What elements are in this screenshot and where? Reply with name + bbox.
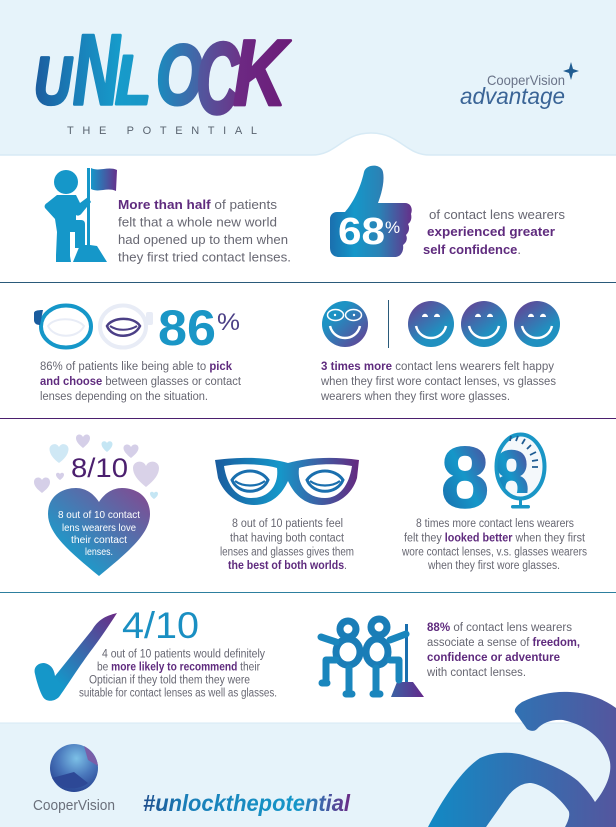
icon: check mark (35, 613, 117, 701)
panel: 68 percent (330, 166, 565, 257)
text block: they first tried contact lenses. (118, 250, 291, 264)
text block: 8 times more contact lens wearers (416, 518, 574, 530)
stat: 86%: % (217, 309, 240, 336)
text block: More than half of patients (118, 197, 278, 212)
text block: when they first wore contact lenses, vs glasses (320, 376, 556, 388)
icon: happy face 2 (461, 301, 507, 347)
title word: UNLOCK: N (73, 14, 121, 125)
text block: with contact lenses. (426, 667, 526, 679)
panel: more than half (45, 168, 291, 264)
CooperVision advantage logo: advantage (460, 83, 565, 109)
hashtag: #unlockthepotential (143, 790, 351, 816)
text block (423, 207, 565, 257)
stat: 86%: 86 (158, 300, 216, 356)
icon: happy face 3 (514, 301, 560, 347)
CooperVision advantage logo: CooperVision (487, 72, 565, 88)
icon: thumbs up: 68 (338, 211, 385, 253)
text block: experienced greater (427, 224, 555, 239)
text block: suitable for contact lenses as well as glasses. (79, 688, 277, 700)
icon: big heart (48, 488, 150, 576)
CooperVision logo (33, 744, 115, 814)
text block (320, 361, 556, 403)
panel: 8 times more (401, 430, 587, 572)
text block (426, 622, 580, 679)
text block: 3 times more contact lens wearers felt happy (321, 361, 554, 373)
icon: person with flag (45, 168, 117, 262)
text block: felt that a whole new world (118, 214, 277, 230)
text block (220, 518, 354, 572)
icon: star (563, 62, 579, 80)
icon: thumbs up: % (385, 218, 400, 237)
icon: 8 and mirror: 8 (441, 430, 489, 526)
text block: Optician if they told them they were (89, 674, 250, 686)
text block (118, 197, 291, 264)
text block: 86% of patients like being able to pick (40, 361, 233, 373)
footer arc graphic (428, 692, 616, 827)
stat: 4/10: 4/10 (122, 605, 199, 646)
icon: pale right lens (100, 306, 153, 348)
title word: UNLOCK: K (233, 20, 292, 125)
text block: had opened up to them when (118, 232, 288, 247)
icon: face with glasses (322, 301, 368, 347)
text block: 8 out of 10 patients feel (232, 518, 343, 530)
text block: associate a sense of freedom, (427, 637, 580, 649)
text block: lenses and glasses gives them (220, 546, 354, 558)
subtitle: THE POTENTIAL (67, 125, 257, 137)
stat: 8/10: 8/10 (71, 453, 128, 483)
text block (401, 518, 587, 572)
icon: thumbs up (330, 166, 412, 257)
heart text: lenses. (85, 547, 113, 558)
text block: confidence or adventure (427, 652, 560, 664)
heart text (58, 510, 140, 558)
text block: wore contact lenses, v.s. glasses wearers (401, 546, 587, 558)
footer band (0, 723, 616, 827)
icon: two 8 figures with flagpole (321, 619, 424, 697)
title word: UNLOCK: C (196, 22, 240, 135)
text block: wearers when they first wore glasses. (320, 391, 510, 403)
icon: glasses with contact lenses (215, 458, 359, 505)
title word: UNLOCK: O (156, 27, 203, 122)
text block (40, 361, 242, 403)
text block: that having both contact (230, 532, 345, 544)
icon: happy face 1 (408, 301, 454, 347)
title word: UNLOCK (34, 14, 292, 135)
text block: be more likely to recommend their (97, 662, 260, 674)
heart text: 8 out of 10 contact (58, 510, 140, 521)
icon: small hearts (34, 434, 159, 499)
text block: and choose between glasses or contact (40, 376, 242, 388)
text block (79, 648, 277, 700)
panel: 4/10 recommend (35, 605, 277, 701)
title word: UNLOCK: U (34, 44, 73, 119)
icon: globe (50, 744, 98, 792)
CooperVision logo: CooperVision (33, 797, 115, 814)
title word: UNLOCK: L (115, 40, 151, 119)
text block: lenses depending on the situation. (40, 391, 208, 403)
heart text: lens wearers love (62, 523, 136, 534)
text block: 4 out of 10 patients would definitely (102, 648, 265, 660)
text block: when they first wore glasses. (427, 560, 560, 572)
text block: of contact lens wearers (429, 207, 565, 222)
icon: teal left lens (34, 306, 91, 348)
text block: self confidence. (423, 242, 521, 257)
stat: 86% (158, 300, 240, 356)
panel: 86 percent (34, 300, 242, 403)
header band with wave (0, 0, 616, 155)
text block: felt they looked better when they first (404, 532, 586, 544)
panel: 3 times more (320, 300, 560, 403)
panel: 8/10 love (34, 434, 159, 576)
icon: 8 and mirror: 8 (494, 436, 529, 521)
CooperVision advantage logo (460, 62, 579, 109)
panel: best of both worlds (215, 458, 359, 572)
text block: the best of both worlds. (228, 560, 347, 572)
text block: 88% of contact lens wearers (427, 622, 572, 634)
heart text: their contact (71, 535, 127, 546)
title logo: Unlock the potential (34, 14, 292, 137)
panel: 88 percent (321, 619, 580, 697)
icon: 8 and mirror (443, 432, 546, 509)
